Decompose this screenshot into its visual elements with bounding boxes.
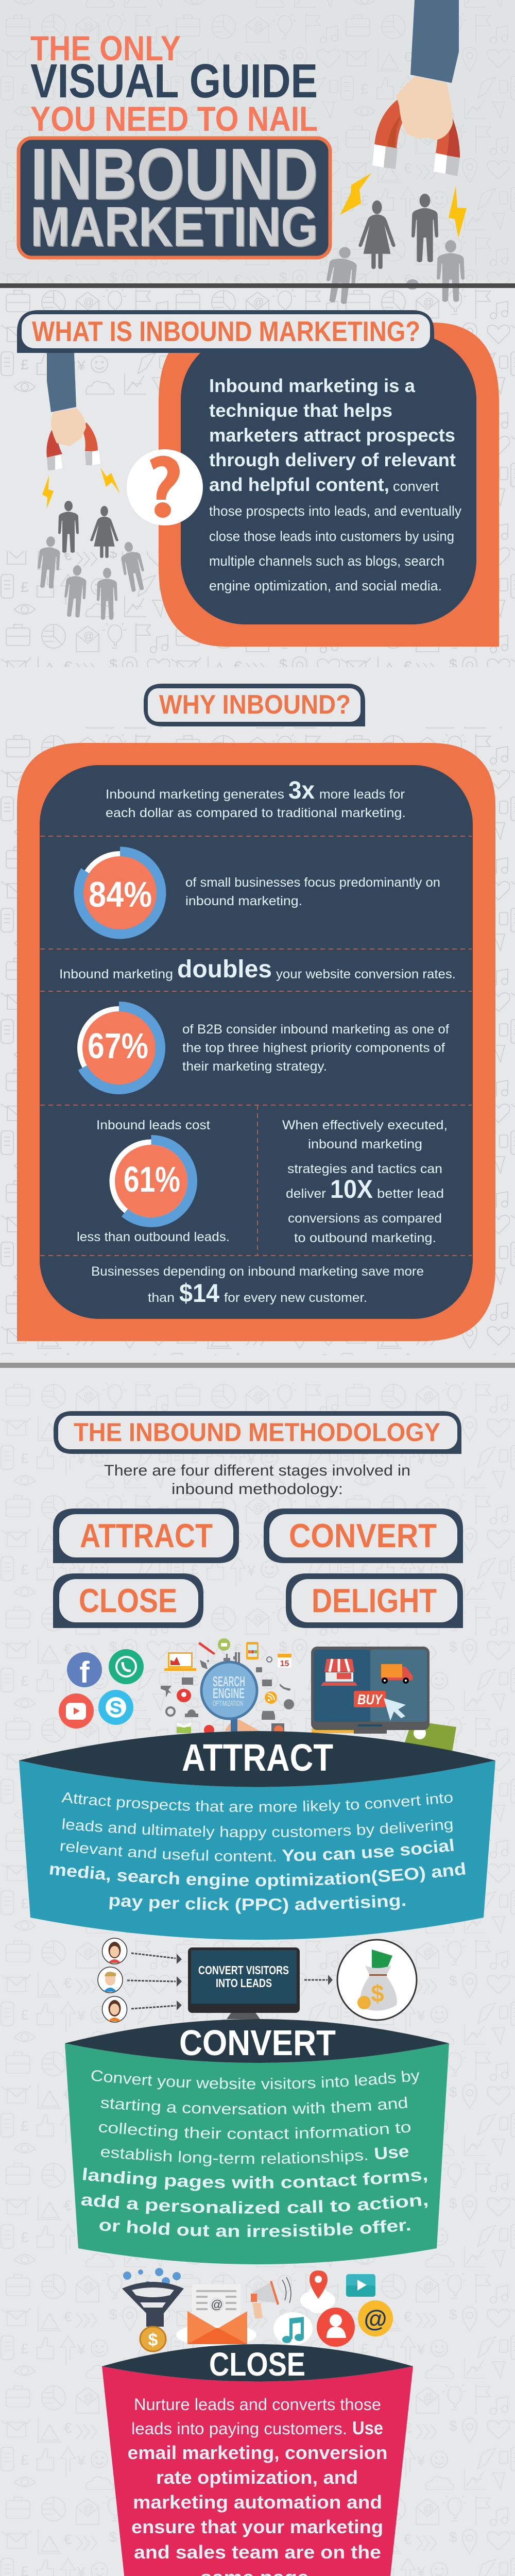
block: attract: ATTRACT: [182, 1736, 333, 1779]
block: close: CLOSE: [209, 2346, 305, 2383]
title badge: inbound marketing: MARKETING: [30, 195, 318, 258]
stat text: small businesses: [185, 875, 440, 908]
stat: 3x more leads: more leads for: [319, 787, 405, 802]
panel: what is inbound marketing: [17, 310, 499, 647]
icon: calendar: 15: [280, 1659, 289, 1668]
definition text: [209, 375, 461, 594]
arrows to monitor: [127, 1953, 328, 2009]
stat text: small businesses: inbound marketing.: [185, 894, 302, 908]
icon: phone: [246, 1642, 259, 1659]
stat text: b2b priority: of B2B consider inbound marketing as one of: [182, 1022, 449, 1037]
title badge: inbound marketing: [19, 133, 330, 258]
heading: why inbound: WHY INBOUND?: [159, 690, 351, 720]
button: attract: ATTRACT: [80, 1517, 213, 1554]
definition text: multiple channels such as blogs, search: [209, 553, 444, 569]
icon: envelope with letter: @: [211, 2298, 223, 2311]
stat: 61% cost: Inbound leads cost: [96, 1118, 210, 1132]
icon: facebook: f: [79, 1656, 90, 1689]
title line: the only: THE ONLY: [30, 29, 181, 68]
stat text: b2b priority: the top three highest priority components of: [182, 1041, 445, 1055]
icon: calendar: [278, 1654, 291, 1668]
button: convert: CONVERT: [289, 1517, 437, 1554]
icon: online store monitor: [311, 1647, 456, 1752]
avatar: visitor one: [102, 1938, 127, 1964]
stat: 61% cost: 61%: [124, 1159, 180, 1199]
stat: save $14: than: [148, 1291, 175, 1305]
icon: skype: S: [110, 1697, 122, 1718]
icon: at sign: [358, 2300, 393, 2336]
buy button: BUY: [357, 1691, 383, 1707]
orange backing panel: [159, 323, 499, 647]
icon: money bag: [337, 1940, 417, 2020]
definition text: close those leads into customers by using: [209, 529, 454, 544]
button: attract: [53, 1509, 239, 1563]
icons: social media: [59, 1649, 144, 1728]
convert description: or hold out an irresistible offer.: [99, 2220, 410, 2237]
icon: magnifier: ENGINE: [213, 1685, 245, 1701]
convert description: Use: [375, 2147, 409, 2160]
diagram: convert visitors into leads: [98, 1938, 417, 2022]
close description: [128, 2395, 387, 2576]
stat: save $14: Businesses depending on inbound marketing save more: [91, 1264, 424, 1279]
donut chart: 67%: 67%: [88, 1026, 148, 1066]
definition text: engine optimization, and social media.: [209, 578, 442, 594]
button: close: CLOSE: [79, 1582, 177, 1619]
monitor: [188, 1947, 300, 2019]
icon: skype: [98, 1690, 133, 1725]
convert description: establish long-term relationships.: [101, 2148, 368, 2166]
stat: 3x more leads: 3x: [288, 777, 315, 804]
button: delight: DELIGHT: [312, 1582, 437, 1619]
icon: magnifier: SEARCH: [213, 1673, 245, 1689]
donut chart: 67%: [77, 1006, 161, 1090]
icon: money bag: $: [371, 1980, 384, 2007]
stat: 3x more leads: each dollar as compared to traditional marketing.: [106, 806, 406, 820]
title badge: inbound marketing: INBOUND: [30, 133, 318, 214]
icons: small gray glyphs: [161, 1652, 294, 1720]
icon: basket: [218, 1638, 230, 1651]
stat: 10x conversions: conversions as compared: [288, 1211, 442, 1226]
stat: 61% cost: [77, 1118, 230, 1244]
orange backing panel: [17, 743, 495, 1341]
close description: marketing automation and: [133, 2492, 382, 2513]
definition text: convert: [393, 479, 439, 494]
stat: 3x more leads: [106, 777, 406, 820]
icon: video play: [346, 2274, 375, 2297]
stat text: b2b priority: their marketing strategy.: [182, 1059, 327, 1074]
icon: facebook: [67, 1652, 102, 1689]
icon: magnifier: [201, 1662, 257, 1732]
navy text panel: [181, 335, 476, 624]
stat text: small businesses: of small businesses focus predominantly on: [185, 875, 440, 890]
attract description: relevant and useful content.: [60, 1841, 276, 1862]
stat: save $14: $14: [179, 1279, 219, 1308]
attract description: leads and ultimately happy customers by delivering: [62, 1818, 453, 1840]
block: convert: CONVERT: [179, 2023, 336, 2063]
icon: user: [317, 2308, 355, 2347]
stat: 61% cost: less than outbound leads.: [77, 1230, 230, 1244]
icon: youtube: [59, 1693, 94, 1728]
attract description: pay per click (PPC) advertising.: [109, 1895, 405, 1914]
stat: 3x more leads: Inbound marketing generates: [106, 787, 284, 802]
stat: save $14: for every new customer.: [224, 1291, 367, 1305]
close description: and sales team are on the: [134, 2541, 381, 2563]
navy stats panel: [40, 765, 473, 1319]
intro text: four stages: [104, 1462, 410, 1498]
donut chart: 84%: 84%: [89, 874, 152, 914]
definition text: through delivery of relevant: [209, 449, 456, 470]
stat: 10x conversions: strategies and tactics can: [287, 1162, 442, 1176]
stat: 10x conversions: inbound marketing: [308, 1137, 422, 1151]
dashed dividers: [40, 836, 472, 1256]
close description: email marketing, conversion: [128, 2442, 387, 2463]
stat: doubles conversion: your website conversion rates.: [276, 967, 456, 981]
icon: truck: [381, 1664, 413, 1684]
monitor: CONVERT VISITORS: [198, 1963, 289, 1977]
icon: hand holding magnifier: [226, 1720, 260, 1731]
definition text: Inbound marketing is a: [209, 375, 416, 396]
icon: question mark: [127, 449, 203, 526]
icon: envelope with letter: [176, 2284, 256, 2346]
attract description: Attract prospects that are more likely to convert into: [61, 1792, 453, 1814]
stat: doubles conversion: Inbound marketing: [59, 967, 173, 981]
icon: music note: [273, 2312, 313, 2345]
heading: why inbound: [144, 684, 365, 726]
heading: the inbound methodology: [54, 1411, 461, 1454]
icon: bulb badge: [177, 1689, 191, 1702]
icon: cursor: [384, 1698, 406, 1721]
block: convert: [65, 2019, 449, 2264]
convert description: landing pages with contact forms,: [82, 2168, 427, 2191]
close description: rate optimization, and: [156, 2467, 358, 2488]
icons: search engine optimization cluster: [161, 1638, 294, 1735]
monitor: INTO LEADS: [216, 1976, 272, 1990]
definition text: and helpful content,: [209, 474, 389, 495]
chart tile: [271, 1723, 284, 1735]
title line: you need to nail: YOU NEED TO NAIL: [30, 99, 318, 139]
stat: 10x conversions: deliver: [286, 1187, 326, 1201]
icon: store: [321, 1659, 357, 1686]
attract description: [49, 1792, 466, 1914]
title line: visual guide: VISUAL GUIDE: [30, 54, 318, 108]
close description: Nurture leads and converts those: [134, 2395, 381, 2414]
icon: magnifier: OPTIMIZATION: [213, 1699, 243, 1708]
icon: location pin on cloud: [300, 2270, 335, 2313]
icon: whatsapp: [109, 1649, 144, 1684]
stat: save $14: [91, 1264, 424, 1308]
definition text: technique that helps: [209, 400, 392, 421]
intro text: four stages: inbound methodology:: [171, 1481, 343, 1498]
header title: [19, 29, 330, 258]
block: attract: [19, 1731, 495, 1940]
button: delight: [286, 1573, 463, 1628]
close description: Use: [352, 2417, 383, 2438]
icon: pencil: [198, 1642, 215, 1655]
donut chart: 84%: [78, 851, 162, 935]
close description: leads into paying customers.: [131, 2419, 347, 2438]
stat: 10x conversions: 10X: [330, 1175, 373, 1204]
attract description: media, search engine optimization(SEO) and: [49, 1862, 466, 1890]
avatar: visitor three: [102, 1996, 127, 2022]
avatar: visitor two: [98, 1967, 123, 1993]
heading tab: [17, 310, 434, 353]
stat: 10x conversions: to outbound marketing.: [294, 1231, 436, 1245]
icon: rss badge: [265, 1691, 277, 1704]
money behind monitor: [402, 1721, 456, 1752]
block: close: [102, 2344, 413, 2576]
stat: 10x conversions: [282, 1118, 448, 1245]
stat: 10x conversions: better lead: [377, 1187, 444, 1201]
icon: funnel with coin: $: [148, 2330, 158, 2350]
stat: doubles conversion: [59, 956, 456, 983]
stat text: b2b priority: [182, 1022, 449, 1074]
heading: the inbound methodology: THE INBOUND METHODOLOGY: [74, 1418, 440, 1447]
button: close: [53, 1573, 203, 1628]
definition text: those prospects into leads, and eventually: [209, 503, 461, 519]
stat: 10x conversions: When effectively executed,: [282, 1118, 448, 1132]
panel: why inbound statistics: [17, 743, 495, 1341]
icon: gift and play: [177, 1723, 214, 1735]
convert description: [81, 2070, 427, 2237]
convert description: add a personalized call to action,: [81, 2195, 427, 2214]
icons: email marketing cluster: [122, 2268, 393, 2351]
convert description: collecting their contact information to: [99, 2123, 410, 2140]
icon: laptop: [164, 1652, 196, 1671]
icon: funnel with coin: [122, 2268, 184, 2351]
convert description: starting a conversation with them and: [100, 2097, 407, 2115]
icon: megaphone: [251, 2277, 291, 2318]
convert description: Convert your website visitors into leads by: [92, 2070, 419, 2090]
arrowheads: [177, 1954, 333, 2010]
heading tab: WHAT IS INBOUND MARKETING?: [32, 315, 420, 347]
icon: at sign: @: [364, 2305, 387, 2332]
definition text: marketers attract prospects: [209, 425, 455, 446]
button: convert: [264, 1509, 463, 1563]
stat: doubles conversion: doubles: [177, 956, 272, 983]
illustration: small magnet and people: [36, 353, 148, 620]
intro text: four stages: There are four different stages involved in: [104, 1462, 410, 1479]
illustration: hand with magnet attracting people: [323, 0, 467, 305]
close description: ensure that your marketing: [131, 2516, 383, 2537]
attract description: You can use social: [282, 1838, 454, 1861]
